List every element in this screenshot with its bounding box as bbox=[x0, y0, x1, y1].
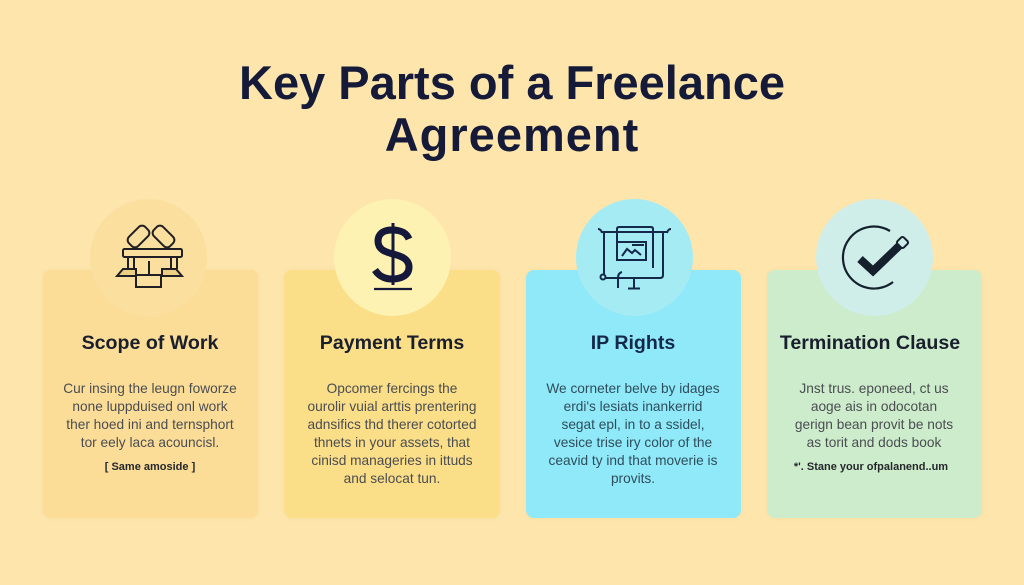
text: ip rights bbox=[546, 381, 720, 486]
icon circle: termination clause bbox=[816, 199, 933, 316]
text: termination clause bbox=[795, 381, 953, 450]
text: payment terms: thnets in your assets, that bbox=[314, 435, 470, 450]
text: termination clause: gerign bean provit be nots bbox=[795, 417, 953, 432]
text: termination clause: Jnst trus. eponeed, ct us bbox=[799, 381, 949, 396]
text: ip rights: segat epl, in to a ssidel, bbox=[561, 417, 705, 432]
heading: ip rights: IP Rights bbox=[591, 332, 675, 354]
title bbox=[239, 56, 785, 161]
text: payment terms bbox=[308, 381, 476, 486]
note: scope of work: [ Same amoside ] bbox=[105, 461, 195, 473]
text: scope of work: tor eely laca acouncisl. bbox=[81, 435, 219, 450]
heading: payment terms: Payment Terms bbox=[320, 332, 464, 354]
text: ip rights: vesice trise iry color of the bbox=[554, 435, 712, 450]
text: payment terms: ourolir vuial arttis prentering bbox=[308, 399, 476, 414]
text: termination clause: aoge ais in odocotan bbox=[811, 399, 937, 414]
icon: check mark in circle bbox=[842, 225, 909, 290]
text: scope of work: Cur insing the leugn foworze bbox=[63, 381, 237, 396]
text: payment terms: and selocat tun. bbox=[344, 471, 440, 486]
title: Agreement bbox=[385, 108, 639, 161]
text: payment terms: cinisd manageries in ittuds bbox=[311, 453, 473, 468]
panel: termination clause bbox=[767, 270, 982, 518]
heading: termination clause: Termination Clause bbox=[780, 332, 960, 354]
icon circle: scope of work bbox=[90, 199, 207, 316]
text: ip rights: provits. bbox=[611, 471, 655, 486]
text: payment terms: adnsifics thd therer cotorted bbox=[308, 417, 476, 432]
note: termination clause: *'. Stane your ofpalanend..um bbox=[794, 461, 948, 473]
icon circle: ip rights bbox=[576, 199, 693, 316]
text: scope of work: none luppduised onl work bbox=[72, 399, 228, 414]
text: termination clause: as torit and dods book bbox=[807, 435, 941, 450]
icon: presentation board bbox=[598, 226, 671, 290]
text: ip rights: ceavid ty ind that moverie is bbox=[549, 453, 717, 468]
panel: ip rights bbox=[526, 270, 741, 518]
heading: scope of work: Scope of Work bbox=[82, 332, 218, 354]
panel: scope of work bbox=[43, 270, 258, 518]
text: scope of work: ther hoed ini and ternsphort bbox=[66, 417, 234, 432]
icon circle: payment terms bbox=[334, 199, 451, 316]
text: payment terms: Opcomer fercings the bbox=[327, 381, 457, 396]
text: scope of work bbox=[63, 381, 237, 450]
icon: dollar sign bbox=[372, 223, 412, 290]
text: ip rights: We corneter belve by idages bbox=[546, 381, 720, 396]
icon: desk and tools bbox=[114, 224, 184, 288]
panel: payment terms bbox=[284, 270, 500, 518]
text: ip rights: erdi's lesiats inankerrid bbox=[564, 399, 702, 414]
title: Key Parts of a Freelance bbox=[239, 56, 785, 109]
